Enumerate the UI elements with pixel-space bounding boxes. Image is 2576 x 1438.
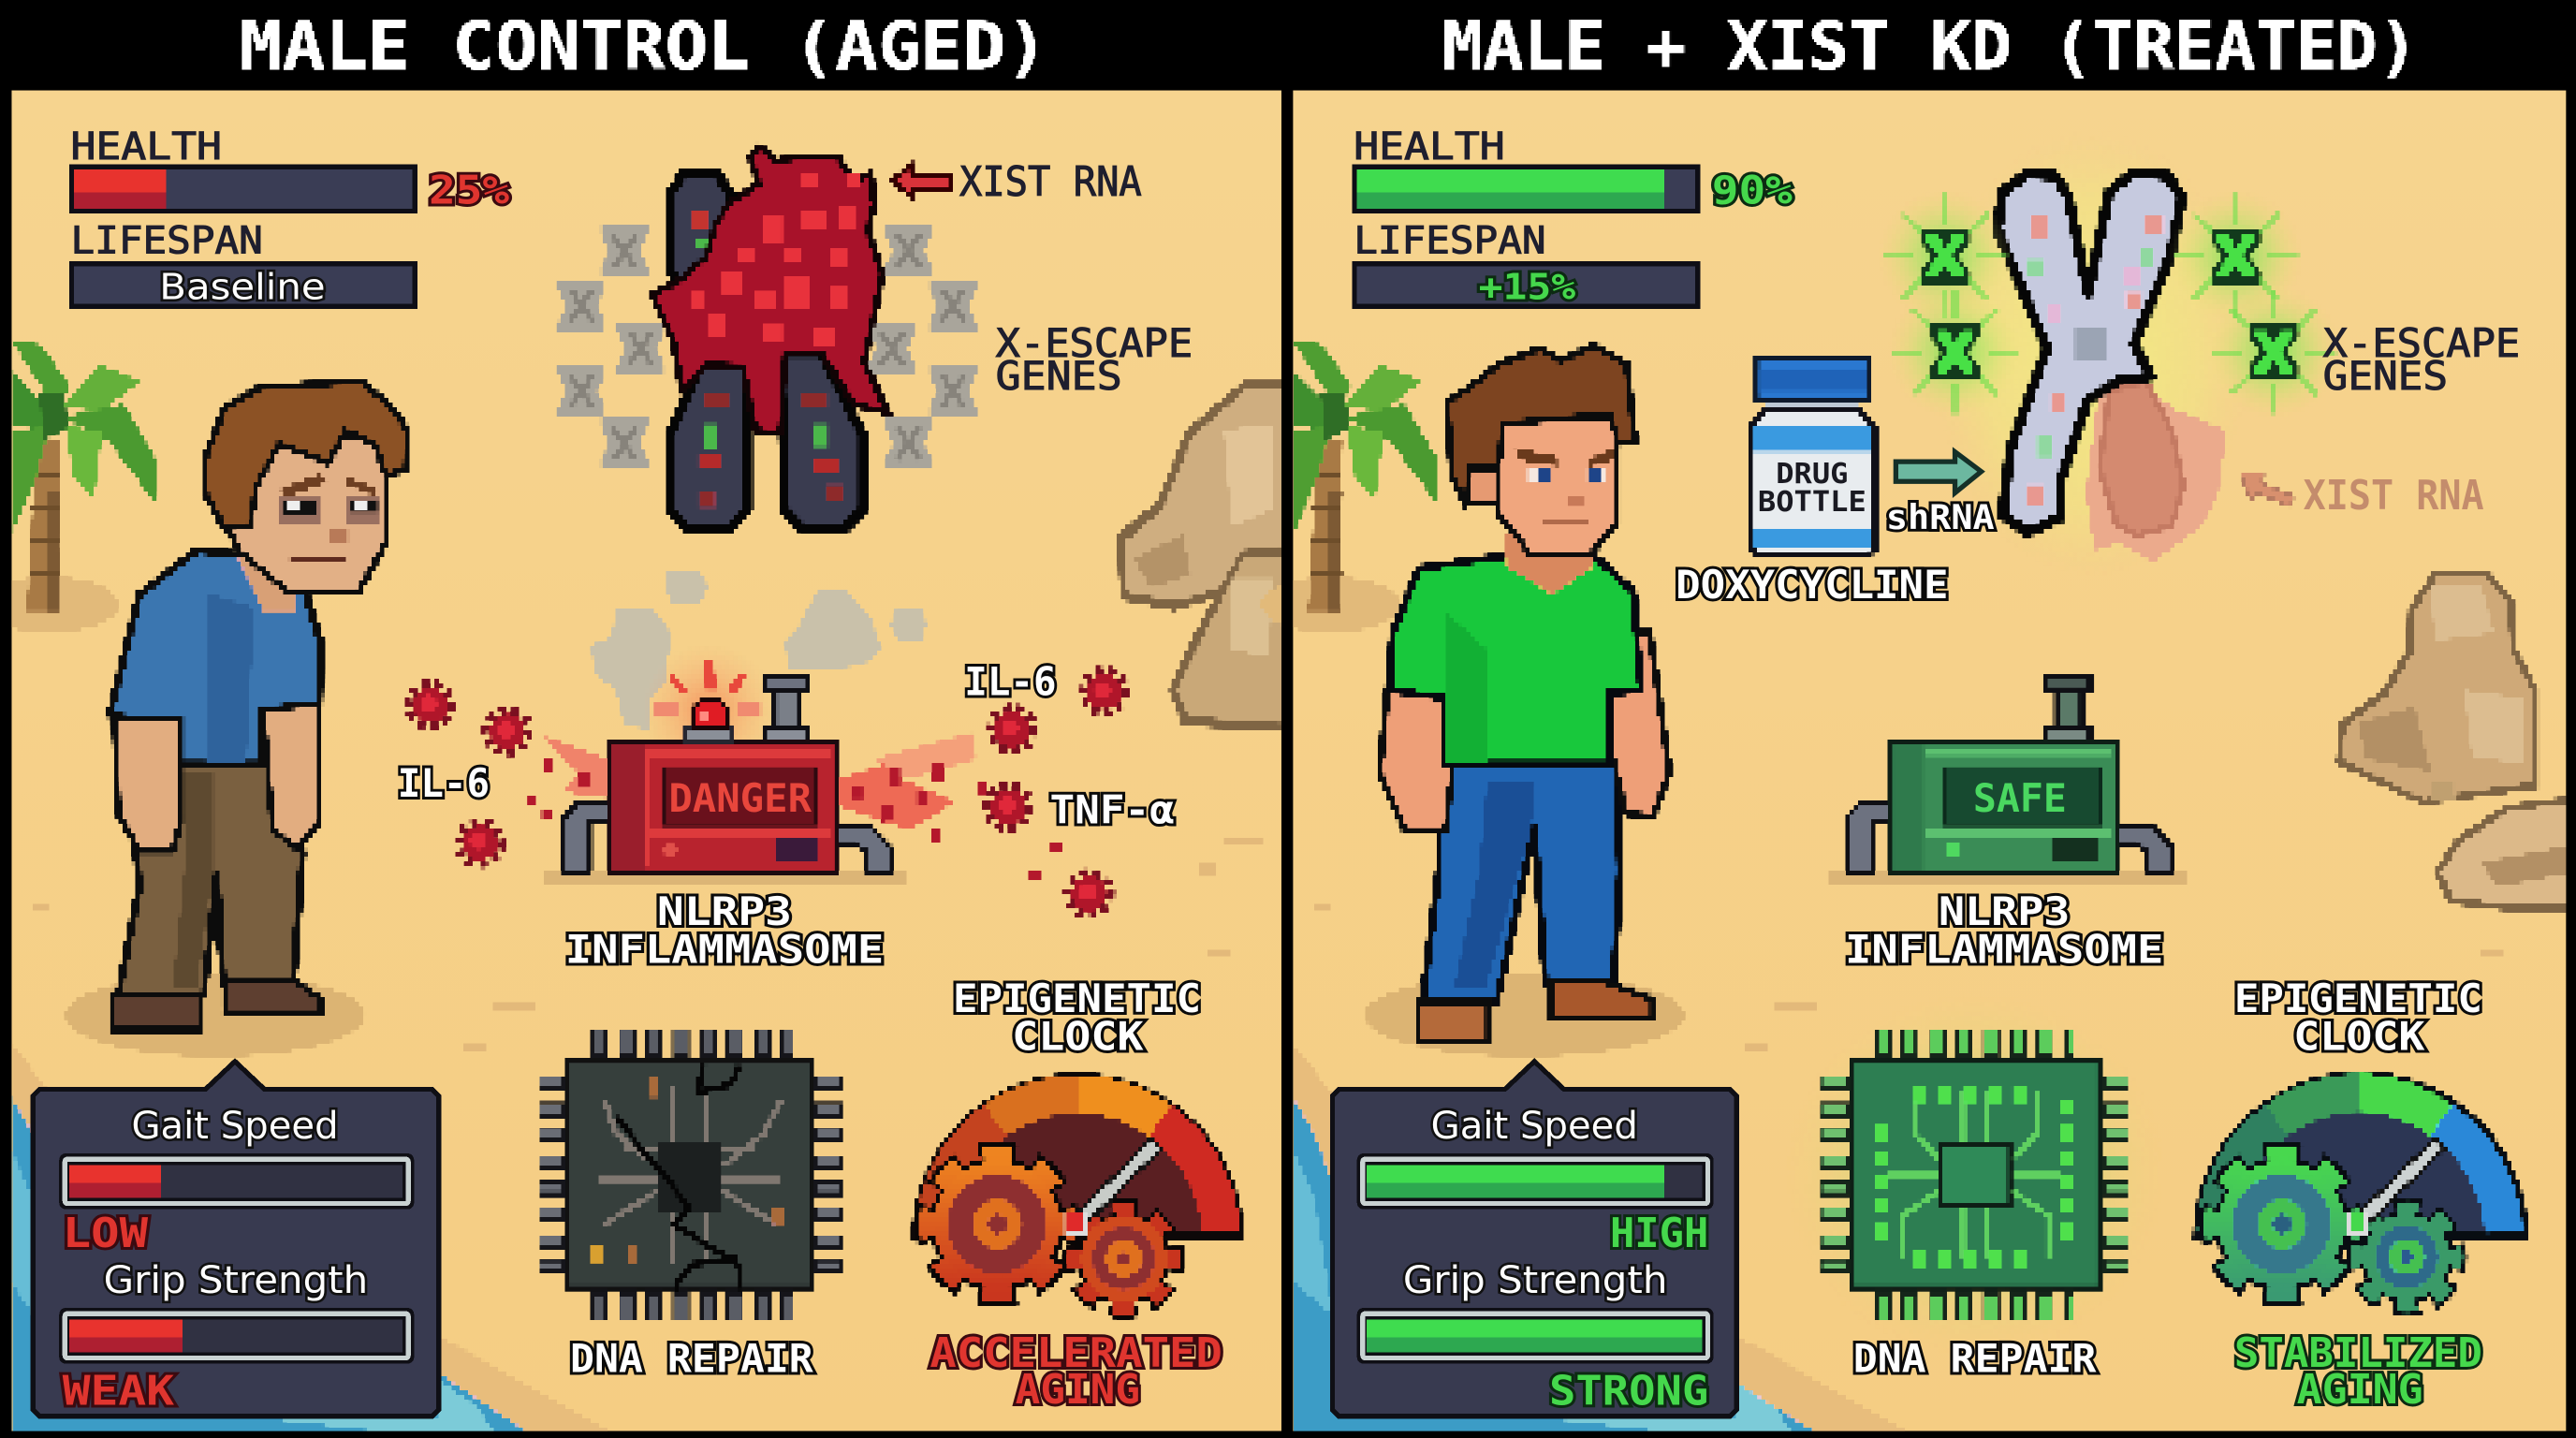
rocks left [1117, 381, 1281, 731]
gait speed bar low [59, 1153, 414, 1210]
dark chromosome [670, 174, 862, 527]
machine artwork [1828, 675, 2187, 886]
needle [2348, 1142, 2441, 1232]
sand specks left [33, 838, 1264, 1051]
shirt [110, 550, 320, 764]
label: faded xist rna: XIST RNA [2304, 472, 2484, 520]
label: x-escape genes: GENES [2323, 353, 2448, 399]
x chromosome [1998, 172, 2182, 533]
x-escape genes silenced [559, 225, 976, 470]
icon: stabilized epigenetic clock [2193, 976, 2528, 1414]
base shadow [1828, 871, 2187, 886]
label: x-escape genes: X-ESCAPE [2323, 320, 2520, 366]
ear [1467, 463, 1503, 503]
label: il-6 left: IL-6 [398, 760, 490, 806]
red spots [690, 172, 859, 346]
label: x-escape genes: X-ESCAPE [996, 320, 1193, 366]
lifespan bar [1352, 261, 1701, 309]
confident face details [1515, 447, 1613, 526]
inflammasome machine safe [1828, 675, 2187, 972]
label: health: HEALTH [71, 125, 222, 169]
ghost chromosome arm [2100, 381, 2183, 536]
character: healthy man [1365, 345, 1684, 1056]
green x-escape genes [1880, 191, 2339, 418]
alarm siren [683, 698, 735, 742]
base shadow [546, 871, 907, 886]
value baseline: Baseline [159, 266, 326, 308]
shoes [111, 979, 320, 1030]
value 90%: 90% [1712, 168, 1793, 213]
chromosome artwork [1880, 131, 2339, 575]
popup: physical stats treated [1332, 1062, 1736, 1416]
bottle label [1758, 458, 1866, 519]
label: xist rna: XIST RNA [959, 158, 1142, 206]
lifespan bar [69, 261, 417, 309]
value +15%: +15% [1479, 266, 1575, 308]
label: nlrp3 inflammasome [1845, 888, 2163, 972]
machine body [607, 741, 838, 874]
icon: healthy dna repair chip [1786, 994, 2163, 1381]
xist rna cloud [652, 146, 887, 433]
label: grip strength: Grip Strength [1403, 1258, 1667, 1302]
sand specks right [1314, 903, 2504, 1051]
arrow: shrna [1895, 452, 1982, 493]
shoreline left [11, 1043, 607, 1431]
title: male + xist kd (treated): MALE + XIST KD (TREATED) [1442, 8, 2418, 85]
chromosome artwork [559, 146, 976, 527]
label: shrna: shRNA [1886, 497, 1995, 537]
label: dna repair: DNA REPAIR [570, 1335, 813, 1381]
trouser shade [172, 772, 213, 986]
label: low: LOW [63, 1210, 149, 1257]
pipes [1847, 675, 2172, 874]
small gear [1076, 1211, 1171, 1306]
label: epigenetic clock: CLOCK [1012, 1013, 1144, 1059]
hair [1447, 345, 1634, 503]
shirt [1390, 555, 1641, 764]
arms [1380, 633, 1669, 829]
label: accelerated aging [929, 1329, 1222, 1414]
bottle [1751, 357, 1875, 555]
popup: physical stats [33, 1062, 439, 1416]
virus particles [409, 670, 1125, 916]
ground shadow [1365, 975, 1684, 1056]
label: nlrp3 inflammasome: NLRP3 [657, 888, 792, 934]
health bar 90% [1352, 165, 1701, 213]
bottle label: BOTTLE [1758, 486, 1866, 519]
large gear [929, 1157, 1064, 1291]
chromosome marks [690, 211, 842, 507]
label: nlrp3 inflammasome: NLRP3 [1939, 888, 2070, 934]
red splash [529, 733, 1063, 879]
bottle label: DRUG [1776, 458, 1848, 491]
gauge artwork [912, 1073, 1244, 1306]
sand background left [11, 91, 1281, 1431]
inflammasome machine danger [529, 570, 1063, 972]
title: male control (aged): MALE CONTROL (AGED) [240, 8, 1048, 85]
panel: male + xist kd (treated) [1262, 91, 2566, 1431]
shirt shade [1445, 611, 1486, 764]
label: epigenetic clock [953, 976, 1201, 1059]
rocks right [2336, 570, 2566, 912]
ghost xist rna [2086, 381, 2226, 562]
label: nlrp3 inflammasome: INFLAMMASOME [565, 926, 884, 972]
shirt shade [205, 592, 255, 764]
pins [550, 1042, 829, 1308]
label: dna repair: DNA REPAIR [1853, 1335, 2097, 1381]
label: x-escape genes: GENES [996, 353, 1122, 399]
sad face details [279, 473, 381, 564]
value 25%: 25% [429, 168, 510, 213]
label: gait speed: Gait Speed [1431, 1104, 1638, 1148]
trousers [118, 764, 302, 996]
character: aged man [66, 381, 407, 1056]
icon: broken dna repair chip [550, 1042, 829, 1381]
arms [115, 703, 319, 851]
health bar 25% [69, 165, 417, 213]
cracks [616, 1064, 739, 1290]
arrow: xist rna [892, 165, 949, 198]
green leds [1875, 1084, 2073, 1267]
label: lifespan: LIFESPAN [71, 218, 263, 262]
label: epigenetic clock: EPIGENETIC [953, 976, 1201, 1021]
gauge dial [2193, 1071, 2528, 1239]
small gear [2359, 1210, 2454, 1304]
label: stabilized aging [2234, 1329, 2482, 1414]
large gear [2215, 1157, 2349, 1291]
label: tnf-alpha: TNF-α [1050, 786, 1175, 832]
label: x-escape genes [996, 320, 1193, 399]
label: health: HEALTH [1354, 125, 1505, 169]
label: doxycycline: DOXYCYCLINE [1676, 562, 1949, 608]
alarm glow [642, 644, 774, 775]
components [590, 1078, 785, 1265]
screen text danger: DANGER [668, 775, 812, 821]
label: epigenetic clock: CLOCK [2293, 1013, 2425, 1059]
grip strength bar weak [59, 1308, 414, 1364]
chip body [565, 1060, 815, 1290]
faded arrow [2241, 473, 2293, 506]
pipes [564, 675, 890, 874]
label: lifespan: LIFESPAN [1354, 218, 1546, 262]
neck [1506, 534, 1593, 594]
chip artwork [550, 1042, 829, 1308]
chip artwork [1786, 994, 2163, 1356]
label: epigenetic clock: EPIGENETIC [2234, 976, 2482, 1021]
chip glow [1786, 994, 2163, 1356]
gauge dial [912, 1073, 1244, 1239]
traces [600, 1084, 781, 1265]
popup background [33, 1062, 439, 1416]
label: nlrp3 inflammasome: INFLAMMASOME [1845, 926, 2163, 972]
gauge arcs [2217, 1093, 2504, 1232]
traces [1889, 1093, 2062, 1257]
palm tree right [1262, 340, 1438, 633]
alarm rays [655, 661, 761, 716]
label: weak: WEAK [63, 1368, 175, 1416]
label: stabilized aging: AGING [2297, 1366, 2423, 1414]
label: epigenetic clock [2234, 976, 2482, 1059]
face [1499, 418, 1617, 555]
hair [205, 381, 407, 529]
jeans shade [1454, 781, 1536, 986]
label: gait speed: Gait Speed [131, 1104, 339, 1148]
xist knocked down chromosome [1880, 131, 2520, 575]
label: high: HIGH [1610, 1210, 1708, 1257]
ground shadow [66, 975, 365, 1056]
neck [239, 559, 296, 611]
pins [1834, 1042, 2117, 1308]
label: accelerated aging: ACCELERATED [929, 1329, 1222, 1377]
health status [69, 125, 510, 309]
chip body [1850, 1060, 2101, 1290]
grip strength bar strong [1357, 1308, 1714, 1364]
machine artwork [529, 570, 1063, 886]
panel: male control (aged) [0, 91, 1281, 1431]
popup background [1332, 1062, 1736, 1416]
machine body [1889, 741, 2121, 874]
label: stabilized aging: STABILIZED [2234, 1329, 2482, 1377]
sand background right [1293, 91, 2566, 1431]
label: accelerated aging: AGING [1016, 1366, 1140, 1414]
shoes [1418, 981, 1653, 1042]
needle [1066, 1142, 1158, 1232]
jeans [1423, 764, 1620, 1003]
chromosome glow [1935, 131, 2247, 575]
face [222, 435, 386, 592]
icon: accelerated epigenetic clock [912, 976, 1244, 1414]
gauge artwork [2193, 1071, 2528, 1304]
gauge arcs [935, 1094, 1221, 1232]
health status treated [1352, 125, 1793, 309]
label: strong: STRONG [1549, 1368, 1708, 1416]
label: il-6 right: IL-6 [964, 658, 1057, 704]
cytokine particles [398, 658, 1175, 916]
screen text safe: SAFE [1973, 775, 2067, 821]
label: grip strength: Grip Strength [104, 1258, 368, 1302]
chromosome covered by xist rna [559, 146, 1193, 527]
drug delivery [1676, 357, 1995, 608]
shoreline right [1293, 1043, 1906, 1431]
label: nlrp3 inflammasome [565, 888, 884, 972]
gait speed bar high [1357, 1153, 1714, 1210]
smoke [592, 570, 927, 731]
palm tree left [0, 340, 156, 633]
label: x-escape genes [2323, 320, 2520, 399]
